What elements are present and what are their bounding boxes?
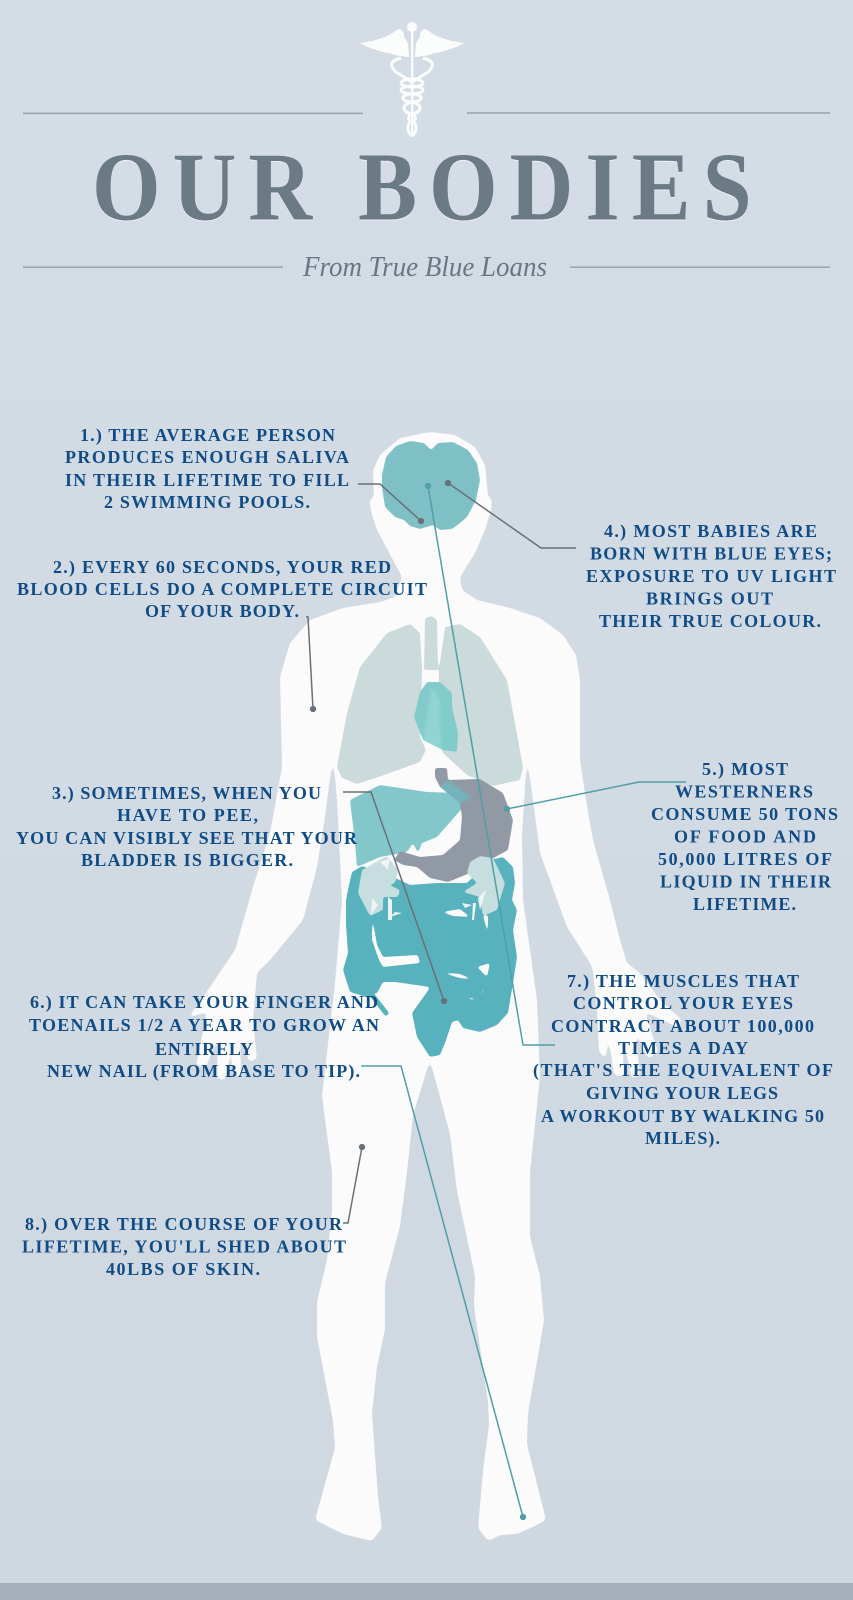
organ: heart [414,682,458,752]
fact 3 [16,783,358,870]
fact 2: 2.) EVERY 60 SECONDS, YOUR RED [53,557,391,578]
connector 2 [306,617,315,711]
subtitle rule: left [23,266,283,268]
header rule: top right [467,112,830,114]
fact 3: BLADDER IS BIGGER. [81,850,293,870]
organ: kidneys [358,856,505,920]
organ: intestines [343,857,517,1057]
organ: lungs [337,616,523,786]
title: OUR BODIES [92,133,752,242]
fact 7: CONTRACT ABOUT 100,000 [551,1016,814,1036]
fact 4: BORN WITH BLUE EYES; [590,544,832,564]
fact 5: 5.) MOST [702,759,788,780]
connector 8 [343,1145,364,1223]
connector 1 [358,484,423,523]
icon: caduceus [360,22,464,137]
fact 2: BLOOD CELLS DO A COMPLETE CIRCUIT [17,579,427,599]
fact 3: HAVE TO PEE, [117,805,258,825]
fact 5: OF FOOD AND [674,826,816,846]
fact 7: (THAT'S THE EQUIVALENT OF [533,1060,833,1081]
fact 7: CONTROL YOUR EYES [573,993,793,1013]
fact 7: GIVING YOUR LEGS [586,1083,778,1103]
fact 5: WESTERNERS [675,782,813,802]
organ: brain [382,441,480,530]
fact 8 [22,1214,346,1279]
fact 4 [586,521,836,631]
subtitle: From True Blue Loans [302,252,547,283]
organ: liver [350,785,472,867]
fact 5: LIFETIME. [693,894,796,914]
fact 1: 2 SWIMMING POOLS. [104,492,310,512]
fact 5 [651,759,838,914]
fact 2: OF YOUR BODY. [145,601,299,621]
fact 4: BRINGS OUT [646,588,773,608]
connector 4 [446,481,576,548]
fact 8: 8.) OVER THE COURSE OF YOUR [25,1214,343,1235]
appendix [372,995,386,1013]
fact 7 [533,971,833,1149]
body silhouette [188,432,682,1541]
fact 1: 1.) THE AVERAGE PERSON [80,425,335,446]
fact 6 [29,992,379,1082]
fact 6: ENTIRELY [155,1039,253,1059]
fact 6: 6.) IT CAN TAKE YOUR FINGER AND [30,992,378,1013]
fact 1 [65,425,349,512]
connector 7 [426,484,555,1045]
fact 4: THEIR TRUE COLOUR. [599,611,821,631]
fact 5: LIQUID IN THEIR [660,872,832,892]
fact 3: YOU CAN VISIBLY SEE THAT YOUR [16,828,358,848]
connector 6 [361,1066,525,1519]
fact 1: PRODUCES ENOUGH SALIVA [65,447,349,467]
fact 7: TIMES A DAY [618,1038,748,1058]
subtitle rule: right [570,266,830,268]
header rule: top left [23,113,363,114]
connector 3 [343,792,446,1003]
fact 7: 7.) THE MUSCLES THAT [567,971,799,992]
fact 4: 4.) MOST BABIES ARE [604,521,817,542]
fact 1: IN THEIR LIFETIME TO FILL [65,470,349,490]
fact 7: MILES). [645,1128,720,1149]
fact 8: 40LBS OF SKIN. [106,1259,260,1279]
fact 2 [17,557,427,621]
footer band [0,1583,853,1600]
fact 6: NEW NAIL (FROM BASE TO TIP). [47,1061,360,1082]
fact 4: EXPOSURE TO UV LIGHT [586,566,836,586]
connector 5 [505,782,686,811]
fact 5: 50,000 LITRES OF [658,849,832,869]
fact 8: LIFETIME, YOU'LL SHED ABOUT [22,1236,346,1256]
fact 7: A WORKOUT BY WALKING 50 [541,1106,824,1126]
fact 3: 3.) SOMETIMES, WHEN YOU [52,783,321,804]
fact 6: TOENAILS 1/2 A YEAR TO GROW AN [29,1015,379,1035]
fact 5: CONSUME 50 TONS [651,804,838,824]
organ: stomach [394,768,513,882]
